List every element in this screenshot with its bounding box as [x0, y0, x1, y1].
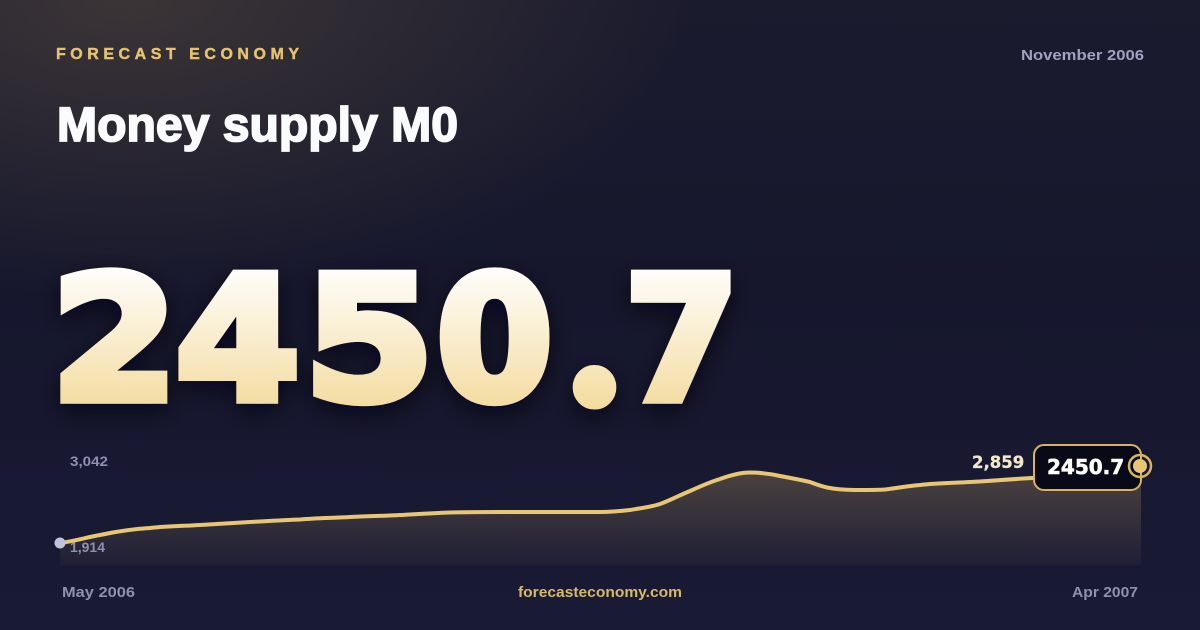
- brand label: FORECAST ECONOMY: [56, 46, 299, 63]
- big value: 2: [51, 241, 178, 440]
- big value: 4: [175, 241, 300, 440]
- big value: 7: [624, 240, 739, 440]
- line: [60, 472, 1060, 543]
- y-axis minimum label: 1,914: [70, 540, 105, 555]
- big value: .: [564, 181, 625, 459]
- website: forecasteconomy.com: [518, 585, 682, 601]
- big value: [51, 181, 739, 459]
- date: November 2006: [1021, 47, 1144, 64]
- big value: 5: [304, 242, 434, 440]
- end point marker: [1129, 455, 1151, 477]
- x-axis end label: Apr 2007: [1072, 585, 1138, 601]
- big value: 0: [436, 240, 553, 439]
- title: Money supply M0: [57, 99, 458, 152]
- current value callout: 2450.7: [1047, 455, 1124, 479]
- area under line: [60, 470, 1141, 565]
- current value callout: [1034, 445, 1141, 490]
- start point: [54, 538, 66, 548]
- y-axis maximum label: 3,042: [70, 454, 108, 469]
- x-axis start label: May 2006: [62, 585, 135, 601]
- previous value label: 2,859: [972, 453, 1024, 472]
- chart: money supply sparkline: [54, 445, 1151, 565]
